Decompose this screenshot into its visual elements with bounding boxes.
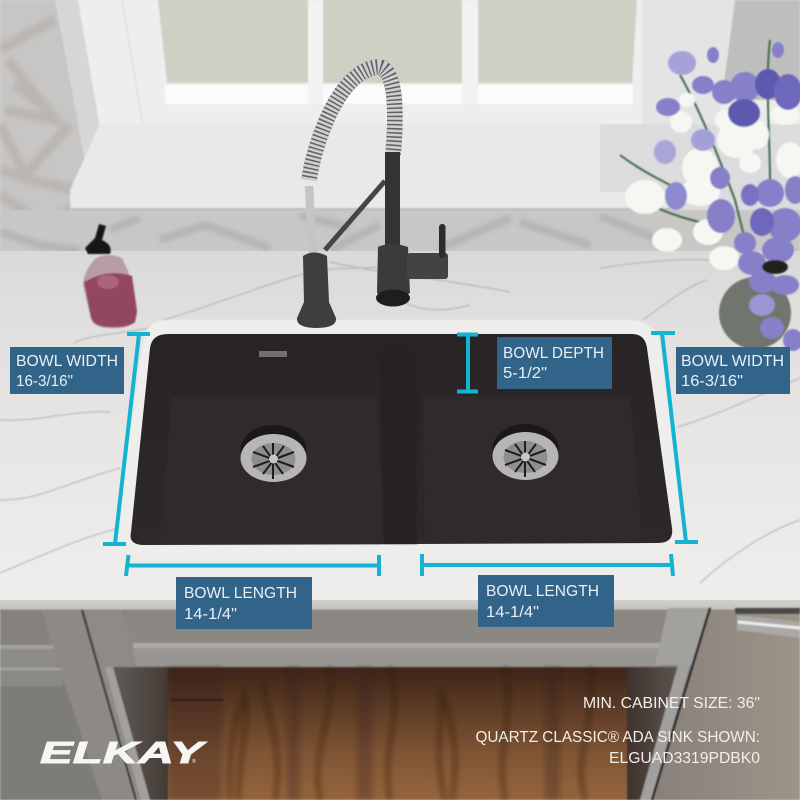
spray holder xyxy=(297,252,336,328)
left cabinet drawers and door xyxy=(0,610,46,644)
callout: left bowl length xyxy=(176,577,312,629)
window bright strip xyxy=(165,85,633,104)
marble left wall xyxy=(0,0,90,252)
dimension line: left bowl length xyxy=(126,555,379,576)
cabinetry xyxy=(0,608,800,800)
callout: right bowl length xyxy=(478,575,614,627)
soap pump xyxy=(85,224,111,254)
callout: left bowl width: 16-3/16" xyxy=(16,373,73,390)
left cabinet stile xyxy=(42,610,135,800)
callout: left bowl width xyxy=(10,347,124,394)
right appliance panel xyxy=(650,610,800,800)
left drain xyxy=(240,425,306,482)
sink xyxy=(115,320,684,553)
minimum cabinet size: MIN. CABINET SIZE: 36" xyxy=(583,695,760,712)
dimension line: bowl depth xyxy=(457,334,478,392)
callout: right bowl length: 14-1/4" xyxy=(486,604,539,621)
window and wall background xyxy=(0,0,800,252)
stems xyxy=(620,40,770,260)
wood plank shading xyxy=(168,667,592,800)
dimension line: right bowl width xyxy=(651,333,698,542)
window casing right xyxy=(625,0,735,128)
model number: ELGUAD3319PDBK0 xyxy=(609,750,760,767)
right bowl floor xyxy=(423,396,642,542)
dishwasher handle xyxy=(737,615,800,638)
dimension line: right bowl length xyxy=(422,554,673,576)
window frame xyxy=(152,0,642,124)
callout: right bowl width: 16-3/16" xyxy=(681,373,743,390)
callout: right bowl width: BOWL WIDTH xyxy=(681,353,784,370)
right drain xyxy=(492,424,558,480)
counter front edge xyxy=(0,600,800,611)
dark cabinet opening xyxy=(113,667,680,800)
callout: left bowl length: 14-1/4" xyxy=(184,606,237,623)
wood floor xyxy=(168,667,627,800)
window sill xyxy=(70,124,800,192)
product details text xyxy=(476,695,760,767)
window pane 2 xyxy=(323,0,462,83)
herringbone backsplash xyxy=(0,210,800,252)
callout: left bowl width: BOWL WIDTH xyxy=(16,353,118,370)
Elkay logo: ELKAY xyxy=(40,735,208,770)
flower bouquet xyxy=(620,40,800,351)
bowl divider xyxy=(380,345,417,544)
lower rail xyxy=(133,643,661,666)
marble veins xyxy=(0,259,800,583)
dimension line: left bowl width xyxy=(103,334,150,544)
right cabinet stile xyxy=(655,608,710,665)
window pane 3 xyxy=(478,0,637,83)
callout: right bowl width xyxy=(676,347,790,394)
marble trim strip xyxy=(55,0,100,188)
sink basin xyxy=(131,334,672,545)
left door gap xyxy=(82,610,136,800)
faucet xyxy=(297,67,448,328)
Elkay logo: ® xyxy=(192,758,196,765)
window pane 1 xyxy=(158,0,308,83)
callout: bowl depth: 5-1/2" xyxy=(503,365,547,382)
callout: bowl depth: BOWL DEPTH xyxy=(503,345,604,362)
white blooms xyxy=(625,93,800,270)
callout: right bowl length: BOWL LENGTH xyxy=(486,583,599,600)
Elkay logo xyxy=(40,735,208,770)
soap bottle xyxy=(83,224,137,328)
sink white rim xyxy=(115,320,684,553)
faucet column xyxy=(385,152,400,247)
pull-down hose xyxy=(309,186,313,258)
left bowl floor xyxy=(160,397,383,544)
coil spring xyxy=(309,67,395,180)
logo plate xyxy=(259,351,287,357)
purple blooms xyxy=(654,42,800,351)
marble right wall xyxy=(715,0,800,100)
faucet base xyxy=(377,244,410,299)
window casing left xyxy=(78,0,167,128)
countertop xyxy=(0,251,800,601)
sink apron panel xyxy=(125,610,670,644)
left door edge xyxy=(85,610,150,800)
faucet handle xyxy=(407,253,448,279)
connecting arm xyxy=(325,181,385,250)
callout: bowl depth xyxy=(497,337,612,389)
callout: left bowl length: BOWL LENGTH xyxy=(184,585,297,602)
right door gap xyxy=(652,608,710,800)
flower vase xyxy=(719,277,791,349)
sink model heading: QUARTZ CLASSIC® ADA SINK SHOWN: xyxy=(476,729,760,746)
